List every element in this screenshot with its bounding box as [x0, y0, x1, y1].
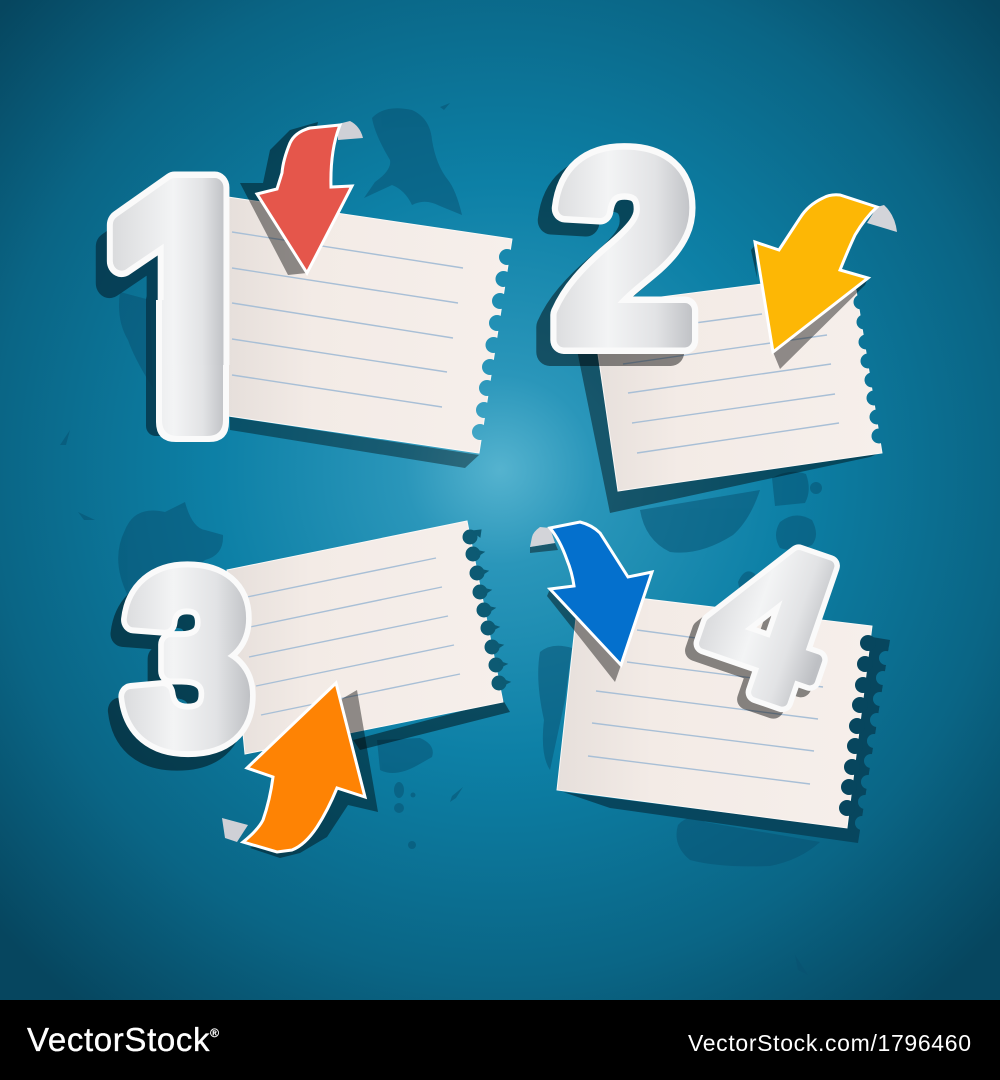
number 1 shadow	[96, 231, 160, 436]
panel: note 4	[557, 591, 895, 843]
number 3: 3	[126, 526, 251, 792]
number 4: 4	[677, 493, 862, 750]
note 2 lines	[620, 314, 839, 453]
number 4: 4	[677, 493, 862, 750]
panel: note 1	[228, 197, 515, 468]
note 1 perforations	[472, 249, 515, 440]
logo: VectorStock: VectorStock	[27, 1021, 210, 1058]
arrow 2 shadow	[751, 245, 868, 369]
note 2 paper	[591, 274, 882, 491]
note 4 right shadow band	[845, 636, 890, 843]
arrow 4 shadow	[530, 543, 621, 682]
number 3: 3	[126, 526, 251, 792]
panel: note 3	[227, 521, 510, 754]
note 4 shadow bite marks	[855, 646, 895, 840]
ink splatters	[60, 103, 822, 975]
number 2: 2	[555, 104, 695, 396]
number 1 outline: 1	[100, 116, 272, 490]
arrow 1 shadow	[240, 122, 318, 275]
number 1 shadow: 1	[88, 138, 260, 512]
note 4 paper	[557, 591, 872, 828]
logo: VectorStock: ®	[210, 1026, 219, 1040]
note 4 lines	[588, 630, 823, 784]
arrow 1 red	[240, 121, 363, 275]
note 2 shadow	[577, 350, 882, 513]
footer url: VectorStock.com/1796460	[688, 1030, 971, 1056]
number 4 shadow: 4	[668, 500, 853, 757]
note 1 paper	[228, 197, 512, 453]
note 3 perforations	[463, 530, 510, 690]
note 1 lines	[232, 232, 463, 407]
note 3 shadow	[353, 700, 510, 750]
number 1 face	[112, 178, 224, 436]
note 4 bottom shadow	[563, 792, 858, 843]
panel: note 2	[577, 274, 886, 513]
number 3 shadow: 3	[115, 540, 240, 806]
number 2: 2	[555, 104, 695, 396]
arrow 3 orange	[222, 683, 378, 858]
number 1	[96, 172, 230, 442]
note 3 paper	[227, 521, 503, 754]
arrow 2 yellow	[751, 195, 897, 369]
arrow 4 blue	[530, 522, 652, 682]
note 1 shadow	[230, 417, 479, 468]
note 2 perforations	[854, 294, 886, 444]
note 4 perforations	[839, 635, 876, 816]
footer bar	[0, 1000, 1000, 1080]
arrow 3 shadow	[250, 690, 378, 858]
number 1 outline	[106, 172, 230, 442]
note 3 lines	[247, 558, 460, 715]
number 1 face: 1	[100, 116, 272, 490]
number 2 shadow: 2	[541, 116, 681, 408]
